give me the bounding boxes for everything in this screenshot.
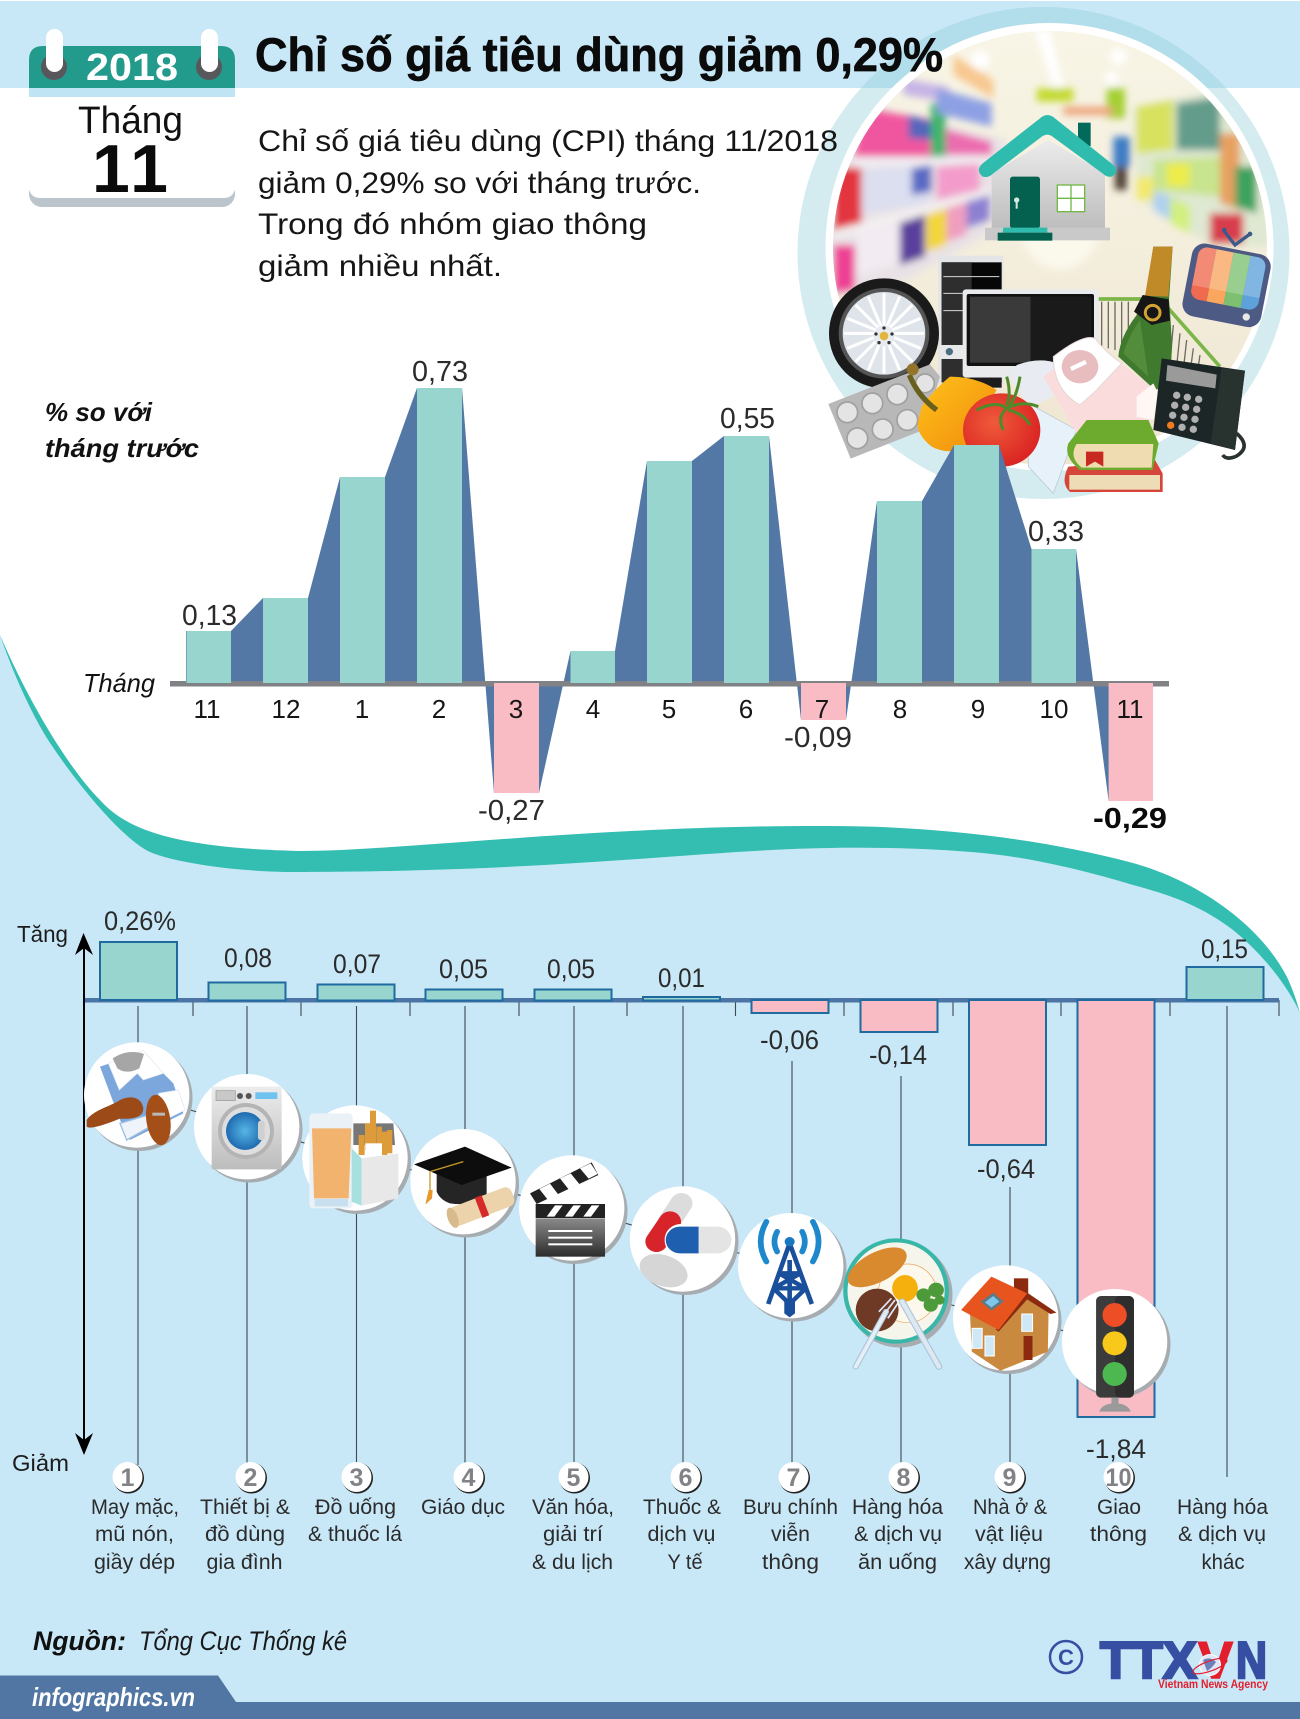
- value labels: 0,08: [224, 943, 272, 973]
- goods illustrations: [828, 115, 1273, 493]
- numbered badges: [112, 1462, 1135, 1494]
- category labels: khác: [1202, 1550, 1245, 1574]
- numbered badges: 6: [679, 1464, 692, 1492]
- background: light blue lower area: [0, 635, 1300, 1719]
- value labels: 0,07: [333, 949, 381, 979]
- value labels: 0,05: [547, 954, 595, 984]
- category labels: & dịch vụ: [854, 1522, 942, 1546]
- blurred supermarket photo: [823, 28, 1270, 468]
- value labels: 0,13: [182, 600, 237, 632]
- icon: film clapperboard: [519, 1155, 628, 1264]
- category labels: gia đình: [206, 1550, 282, 1574]
- category labels: Giao: [1097, 1495, 1141, 1519]
- source line: Nguồn:: [33, 1626, 126, 1656]
- icon: communications tower: [738, 1213, 846, 1322]
- intro paragraph: Trong đó nhóm giao thông: [258, 208, 647, 241]
- value labels: -0,06: [760, 1025, 819, 1055]
- calendar badge: [29, 29, 235, 207]
- month labels: 5: [662, 694, 676, 724]
- month labels: 10: [1040, 694, 1068, 724]
- intro paragraph: giảm nhiều nhất.: [258, 250, 502, 283]
- value labels: -0,14: [869, 1040, 927, 1070]
- website: infographics.vn: [32, 1682, 195, 1712]
- axis baseline: [84, 998, 1279, 1002]
- value labels: [182, 356, 1167, 835]
- category labels: Nhà ở &: [973, 1495, 1047, 1519]
- month labels: 11: [194, 694, 220, 724]
- category labels: & du lịch: [532, 1550, 613, 1574]
- guide lines: [138, 1000, 1279, 1477]
- category labels: thông: [1090, 1522, 1147, 1546]
- icon: computer tower: [938, 256, 1003, 384]
- category labels: Thuốc &: [643, 1495, 721, 1519]
- value labels: -1,84: [1086, 1434, 1146, 1464]
- category labels: Giáo dục: [421, 1495, 505, 1519]
- increase label: Tăng: [17, 921, 68, 947]
- numbered badges: 2: [244, 1464, 257, 1492]
- category labels: Y tế: [668, 1550, 703, 1574]
- month labels: 2: [432, 694, 446, 724]
- icon: drink and cigarettes: [302, 1105, 411, 1214]
- numbered badges: 4: [462, 1464, 476, 1492]
- icon: plate of food: [841, 1238, 952, 1367]
- axis line: [170, 681, 1169, 686]
- value labels: 0,26%: [104, 906, 176, 936]
- category labels: Hàng hóa: [852, 1495, 943, 1519]
- monthly CPI bar chart: [83, 356, 1169, 835]
- category labels: Bưu chính: [743, 1495, 838, 1519]
- category labels: & dịch vụ: [1178, 1522, 1266, 1546]
- category labels: ăn uống: [858, 1550, 937, 1574]
- category labels: mũ nón,: [95, 1522, 174, 1546]
- month labels: [194, 694, 1144, 724]
- icon: shirt: [1010, 337, 1158, 493]
- icon: house: [953, 1265, 1062, 1374]
- icon: blister pack of pills: [828, 364, 940, 459]
- icon: bell pepper: [907, 363, 997, 451]
- logo: TTXVN: [1050, 1632, 1269, 1691]
- logo: TTXVN: Vietnam News Agency: [1158, 1679, 1269, 1691]
- category labels: vật liệu: [975, 1522, 1043, 1546]
- decorative photo circle with goods: [798, 7, 1290, 499]
- bars for each month: [186, 388, 1153, 801]
- numbered badges: 3: [350, 1464, 363, 1492]
- category labels: viễn: [771, 1521, 810, 1546]
- footer band: [0, 1676, 1300, 1719]
- calendar year: 2018: [86, 47, 178, 89]
- icon: desk phone: [1153, 358, 1245, 458]
- numbered badges: 10: [1106, 1464, 1132, 1492]
- month labels: 6: [739, 694, 753, 724]
- icon: monitor: [963, 289, 1099, 388]
- month labels: 3: [509, 694, 523, 724]
- numbered badges: 1: [121, 1464, 135, 1492]
- category labels: dịch vụ: [648, 1522, 716, 1546]
- icon: clothing and shoes: [84, 1042, 192, 1151]
- category labels: Hàng hóa: [1177, 1495, 1268, 1519]
- title: Chỉ số giá tiêu dùng giảm 0,29%: [255, 28, 943, 81]
- month labels: 1: [355, 694, 369, 724]
- category change chart: [12, 906, 1279, 1574]
- icon: shopping cart: [1098, 299, 1220, 373]
- month labels: 7: [815, 694, 829, 724]
- decrease label: Giảm: [12, 1450, 69, 1476]
- month labels: 8: [893, 694, 907, 724]
- value labels: 0,73: [412, 356, 468, 388]
- icon: medicine capsules: [630, 1186, 738, 1295]
- category labels: xây dựng: [964, 1550, 1051, 1574]
- numbered badges: 5: [567, 1464, 581, 1492]
- source line: [33, 1626, 347, 1656]
- intro paragraph: [258, 125, 838, 283]
- intro paragraph: giảm 0,29% so với tháng trước.: [258, 167, 701, 200]
- value labels: -0,27: [478, 795, 545, 827]
- month labels: 12: [272, 694, 300, 724]
- category labels: May mặc,: [91, 1495, 179, 1519]
- icon: wheel: [829, 278, 939, 388]
- chart axis title: percent vs previous month: % so với: [45, 397, 153, 427]
- month axis title: Tháng: [83, 668, 156, 698]
- icon: champagne bottle: [1118, 247, 1173, 390]
- month labels: 9: [971, 694, 985, 724]
- month labels: 4: [586, 694, 600, 724]
- numbered badges: 9: [1003, 1464, 1016, 1492]
- icon: house: [979, 115, 1116, 241]
- top header band: [0, 1, 1300, 88]
- category labels: giầy dép: [94, 1550, 175, 1574]
- bars per category: [100, 942, 1264, 1417]
- value labels: 0,01: [658, 963, 705, 993]
- category labels: giải trí: [543, 1522, 603, 1546]
- intro paragraph: Chỉ số giá tiêu dùng (CPI) tháng 11/2018: [258, 125, 838, 158]
- category labels: thông: [762, 1550, 819, 1574]
- value labels: 0,05: [439, 954, 488, 984]
- value labels: 0,33: [1028, 516, 1084, 548]
- category labels: Đồ uống: [315, 1495, 396, 1519]
- icon: traffic light: [1062, 1289, 1170, 1412]
- numbered badges: 8: [897, 1464, 911, 1492]
- month labels: 11: [1116, 694, 1144, 724]
- icon: television: [1180, 228, 1273, 329]
- value labels: 0,15: [1201, 934, 1248, 964]
- value labels: -0,29: [1093, 803, 1167, 835]
- icon: stack of books: [1065, 420, 1163, 492]
- icon: tomato: [963, 377, 1040, 467]
- source line: Tổng Cục Thống kê: [139, 1626, 347, 1656]
- value labels: -0,64: [977, 1154, 1035, 1184]
- category labels: & thuốc lá: [308, 1522, 402, 1546]
- icon: washing machine: [194, 1074, 302, 1182]
- vertical arrow: increase / decrease: [12, 921, 93, 1476]
- calendar month word: Tháng: [78, 100, 183, 142]
- chart axis title: percent vs previous month: tháng trước: [45, 433, 200, 463]
- logo: TTXVN: N: [1236, 1632, 1267, 1690]
- category labels: đồ dùng: [205, 1522, 285, 1546]
- category labels: [91, 1495, 1268, 1574]
- area between bars: [186, 388, 1153, 801]
- category labels: Thiết bị &: [200, 1495, 290, 1519]
- chart axis title: percent vs previous month: [45, 397, 200, 463]
- teal wave divider: [0, 635, 1300, 1013]
- category labels: Văn hóa,: [532, 1495, 614, 1519]
- logo: TTXVN: V: [1198, 1632, 1233, 1690]
- value labels: [104, 906, 1248, 1464]
- value labels: 0,55: [720, 403, 775, 435]
- calendar month number: 11: [92, 131, 168, 207]
- logo: TTXVN: C: [1058, 1645, 1074, 1670]
- numbered badges: 7: [787, 1464, 800, 1492]
- icon: graduation cap and diploma: [410, 1129, 519, 1238]
- value labels: -0,09: [784, 722, 852, 754]
- logo: TTXVN: TTX: [1100, 1632, 1197, 1690]
